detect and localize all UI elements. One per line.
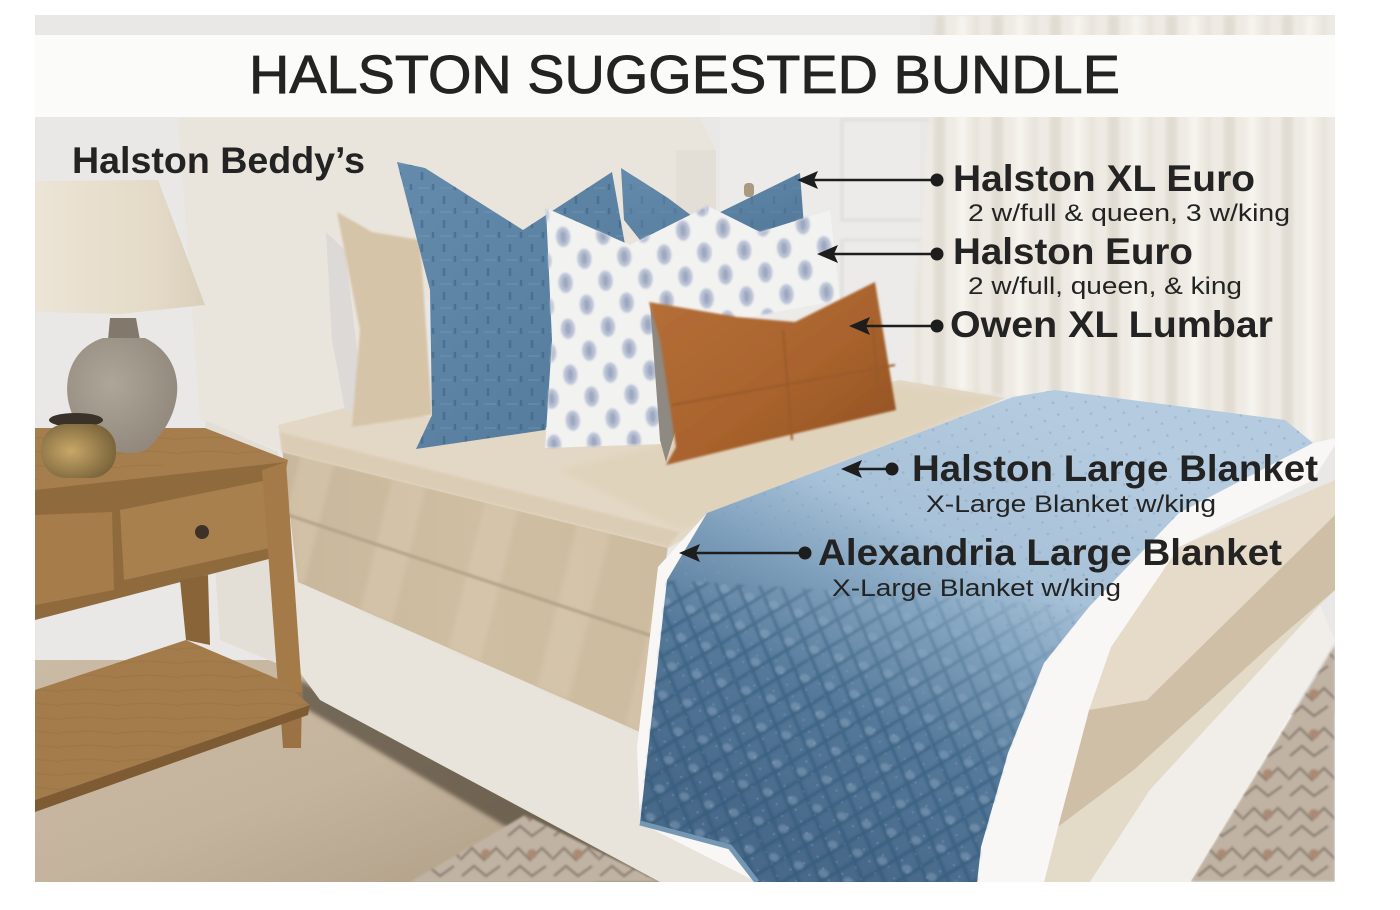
wall door panels: [842, 120, 926, 296]
note: X-Large Blanket w/king: [832, 575, 1121, 602]
title: HALSTON SUGGESTED BUNDLE: [249, 45, 1120, 105]
name: Halston XL Euro: [953, 158, 1255, 199]
xl euro pillow right: [621, 168, 805, 240]
white blanket: [637, 397, 1340, 882]
mattress topper side: [282, 448, 668, 732]
callout: Halston XL Euro: [797, 158, 1290, 227]
callout: Halston Euro: [817, 231, 1242, 300]
callout: Owen XL Lumbar: [849, 304, 1273, 345]
note: X-Large Blanket w/king: [926, 491, 1216, 518]
name: Alexandria Large Blanket: [818, 532, 1282, 573]
arrow: [679, 544, 812, 562]
title band: [35, 35, 1335, 117]
name: Halston Euro: [953, 231, 1193, 272]
bed right side: [1044, 480, 1335, 882]
note: 2 w/full & queen, 3 w/king: [968, 200, 1290, 227]
callout: Alexandria Large Blanket: [679, 532, 1282, 602]
arrow: [797, 171, 944, 189]
name: Halston Large Blanket: [912, 448, 1318, 489]
note: 2 w/full, queen, & king: [968, 273, 1242, 300]
leather lumbar pillow: [649, 282, 896, 465]
euro pillow left: [545, 207, 720, 448]
large quilted blanket: [640, 390, 1313, 883]
lamp: [35, 180, 205, 453]
sham pillow white: [326, 232, 358, 412]
finial: [744, 183, 754, 197]
bed base: [295, 580, 760, 882]
candle jar: [41, 413, 116, 478]
label: Halston Beddy's: Halston Beddy’s: [72, 140, 365, 181]
arrow: [849, 317, 944, 335]
xl euro pillow left: [397, 162, 626, 449]
sham pillow tan: [337, 212, 432, 427]
name: Owen XL Lumbar: [950, 304, 1273, 345]
comforter top: [278, 380, 1005, 548]
nightstand: [35, 428, 310, 812]
rug right: [1190, 645, 1335, 882]
headboard: [178, 118, 716, 672]
rug left: [410, 815, 660, 882]
arrow: [817, 245, 944, 263]
floor shadow: [300, 680, 660, 882]
curtain: [908, 15, 1335, 445]
floor: [35, 660, 660, 882]
callout: Halston Large Blanket: [841, 448, 1318, 518]
arrow: [841, 460, 898, 478]
wall: [35, 15, 1335, 715]
euro pillow right: [705, 205, 840, 318]
